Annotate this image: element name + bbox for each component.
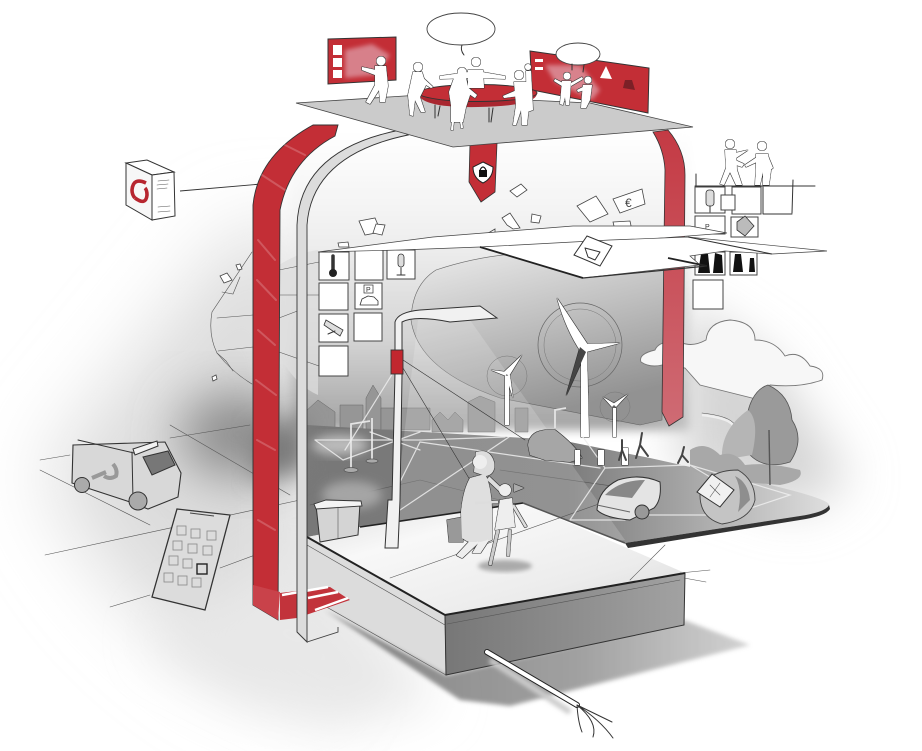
block front face (445, 573, 685, 675)
top platform (296, 95, 693, 147)
road surface (307, 425, 829, 543)
shield lock icon (473, 162, 493, 183)
lamp light beam (390, 320, 625, 552)
parked car front (597, 477, 660, 520)
pod vehicle with sign (697, 470, 755, 524)
people at the table (362, 56, 592, 130)
cable with frayed wires (487, 652, 613, 738)
red ducts at base (280, 587, 350, 620)
block left side (307, 537, 446, 675)
bollards (575, 448, 628, 465)
camera tile (319, 314, 348, 342)
left ground extension with perspective lines (40, 425, 640, 607)
far city (305, 385, 528, 432)
lamp sensor box (391, 350, 403, 374)
dome sphere (411, 252, 664, 425)
microphone tile (387, 250, 415, 279)
large disc behind scene (211, 250, 318, 395)
tablet (152, 509, 230, 610)
right tile grid: P (705, 224, 710, 231)
euro banknote: € (625, 196, 632, 210)
server with logo (126, 160, 273, 220)
shopping cart sheet (574, 236, 612, 266)
parked car back (528, 430, 582, 462)
data network lines (315, 368, 790, 520)
block shadow (325, 610, 750, 706)
silhouette tile (730, 252, 757, 275)
sidewalk block (307, 500, 750, 706)
clouds (641, 320, 823, 400)
van sheet (577, 196, 608, 222)
silhouette tile (695, 252, 725, 275)
round table (418, 84, 537, 122)
right lamp post (702, 413, 735, 482)
light pillar (297, 130, 408, 642)
light pool glows (312, 435, 382, 509)
right road platform underside (625, 505, 830, 548)
thermometer tile (319, 252, 349, 280)
right wall board (530, 51, 649, 113)
woman and child (447, 451, 532, 572)
right tile grid (693, 174, 815, 309)
right arch (653, 130, 685, 426)
main street lamp (385, 306, 497, 548)
service van (72, 440, 181, 510)
horizon dark band (253, 418, 307, 480)
left red arch (253, 125, 338, 620)
euro banknote (613, 189, 645, 213)
sidewalk top (307, 503, 685, 615)
left wall board (328, 37, 396, 84)
floating data plates (318, 226, 827, 278)
street lamps background (344, 408, 566, 472)
wind turbines (487, 298, 630, 437)
handshake figures (720, 140, 773, 185)
security banner (469, 143, 497, 202)
dark wires from lamp (403, 360, 525, 480)
traffic light tile (695, 187, 725, 213)
left sensor grid (279, 250, 415, 376)
people in background (619, 433, 688, 463)
loose data sheets (212, 184, 645, 381)
parking tile: P (366, 287, 371, 294)
electrical cabinet (314, 500, 362, 542)
speech bubbles (427, 13, 600, 72)
trees (690, 385, 801, 485)
wrench logo (92, 464, 117, 478)
